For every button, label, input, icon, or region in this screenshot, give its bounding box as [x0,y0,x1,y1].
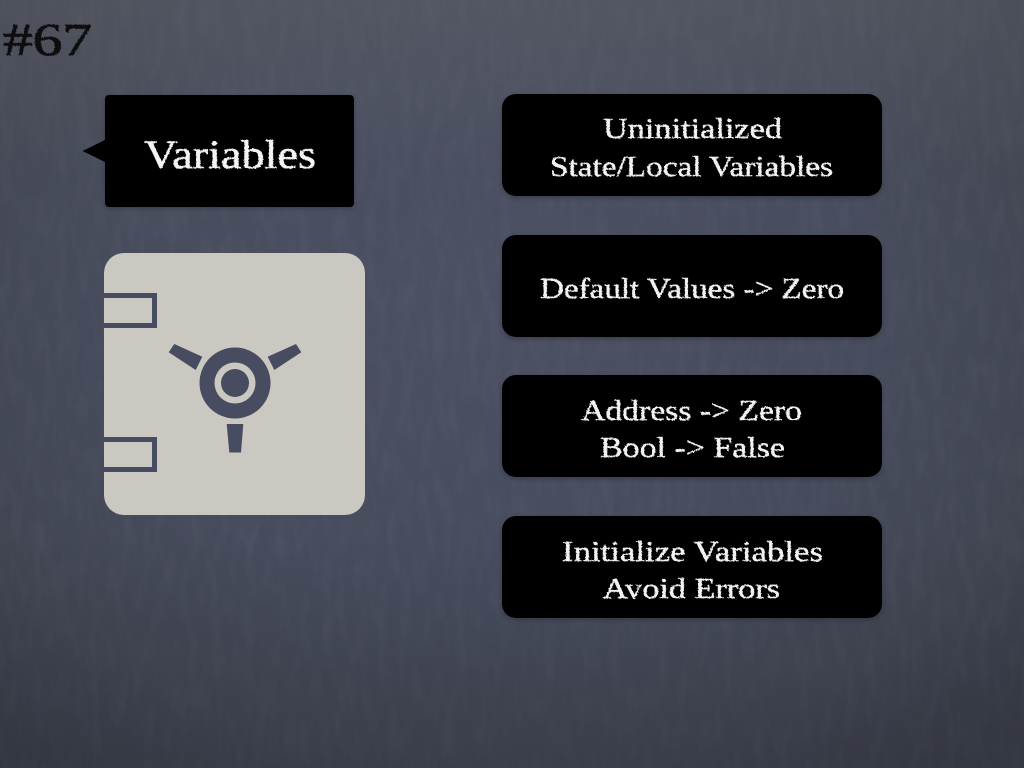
icon: safe [104,253,365,515]
callout: Variables heading: Variables [144,132,316,177]
box: address and bool defaults [502,375,882,479]
slide number: #67 [3,14,92,65]
box: initialize variables: Initialize Variables [562,537,823,568]
bottom hinge [104,437,157,472]
box: address and bool defaults: Address -> Zero [581,396,802,427]
box: uninitialized variables: State/Local Variables [550,152,833,183]
callout: Variables heading [82,95,354,208]
box: uninitialized variables [502,94,882,198]
box: uninitialized variables: Uninitialized [603,114,782,145]
box: initialize variables: Avoid Errors [603,574,780,605]
box: default values: Default Values -> Zero [540,274,844,305]
dial spokes [169,344,301,452]
box: default values [502,235,882,339]
dial [200,348,270,418]
box: initialize variables [502,516,882,620]
box: address and bool defaults: Bool -> False [600,433,785,464]
top hinge [104,293,157,328]
safe body [104,253,365,515]
